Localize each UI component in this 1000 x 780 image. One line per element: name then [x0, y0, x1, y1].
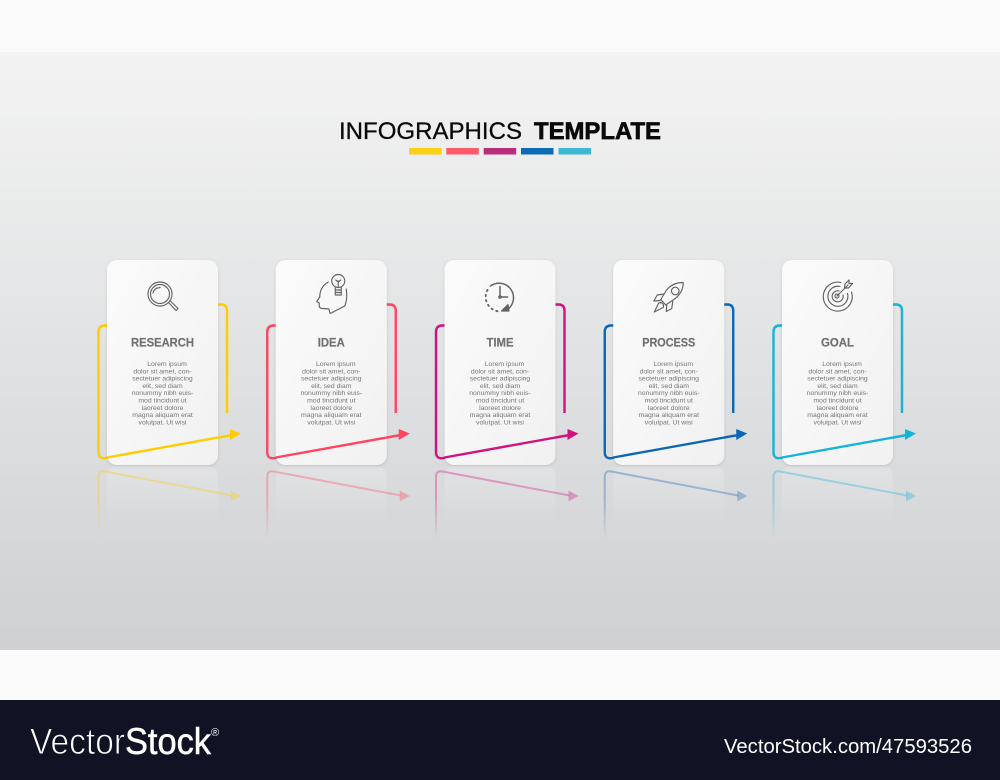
- text: goal: dolor sit amet, con-: [808, 368, 867, 375]
- icon: rocket: [654, 282, 683, 312]
- text: time: dolor sit amet, con-: [471, 368, 529, 375]
- text: process: Lorem ipsum: [653, 361, 693, 368]
- text: research: Lorem ipsum: [147, 361, 187, 368]
- text: goal: sectetuer adipiscing: [807, 376, 868, 383]
- bracket: process: [605, 304, 738, 458]
- footer image id: VectorStock.com/47593526: [724, 736, 972, 758]
- icon: target: [823, 280, 852, 311]
- icon: clock: [486, 283, 514, 311]
- bracket: idea: [267, 304, 401, 458]
- text: goal: Lorem ipsum: [822, 361, 862, 368]
- card: process: [613, 260, 724, 465]
- card: idea: [276, 260, 387, 465]
- text: idea: dolor sit amet, con-: [302, 368, 360, 375]
- icon: magnifier: [148, 282, 178, 310]
- title: [339, 118, 661, 145]
- text: time: nonummy nibh euis-: [469, 390, 531, 397]
- heading: research: RESEARCH: [131, 336, 194, 350]
- heading: goal: GOAL: [821, 336, 854, 350]
- icon: head with light bulb: [317, 274, 347, 314]
- text: process: dolor sit amet, con-: [640, 368, 698, 375]
- text: idea: magna aliquam erat: [301, 412, 362, 419]
- text: goal: volutpat. Ut wisi: [814, 419, 862, 426]
- panel: time: [436, 260, 578, 541]
- text: process: mod tincidunt ut: [645, 398, 693, 404]
- text: research: mod tincidunt ut: [138, 398, 187, 404]
- text: process: magna aliquam erat: [638, 412, 699, 419]
- text: research: magna aliquam erat: [132, 412, 193, 419]
- text: process: elit, sed diam: [649, 383, 689, 390]
- text: time: Lorem ipsum: [485, 361, 525, 368]
- arrow: idea: [276, 429, 410, 458]
- title: TEMPLATE: [534, 118, 661, 145]
- bracket: goal: [774, 304, 907, 458]
- text: idea: elit, sed diam: [311, 383, 352, 390]
- text: research: nonummy nibh euis-: [132, 390, 193, 397]
- text: goal: elit, sed diam: [817, 383, 858, 390]
- card: time: [444, 260, 556, 465]
- text: idea: mod tincidunt ut: [307, 398, 355, 404]
- text: idea: sectetuer adipiscing: [301, 376, 362, 383]
- heading: idea: IDEA: [318, 336, 345, 350]
- text: time: laoreet dolore: [479, 405, 521, 412]
- text: goal: magna aliquam erat: [807, 412, 868, 419]
- arrow: goal: [782, 429, 916, 458]
- bracket: research: [98, 304, 232, 458]
- reflection: process: [604, 470, 747, 534]
- text: process: laoreet dolore: [648, 405, 690, 412]
- panel: goal: [774, 260, 916, 541]
- heading: time: TIME: [486, 336, 514, 350]
- reflection: goal: [772, 470, 916, 534]
- panel: research: [98, 260, 241, 541]
- card: goal: [782, 260, 893, 465]
- text: time: mod tincidunt ut: [476, 398, 524, 404]
- text: research: volutpat. Ut wisi: [139, 419, 187, 426]
- arrow: research: [107, 429, 241, 458]
- text: time: elit, sed diam: [480, 383, 520, 390]
- text: research: dolor sit amet, con-: [133, 368, 192, 375]
- reflection: time: [435, 470, 578, 534]
- arrow: time: [444, 429, 578, 458]
- text: research: elit, sed diam: [142, 383, 183, 390]
- text: research: sectetuer adipiscing: [132, 376, 193, 383]
- card: research: [107, 260, 218, 465]
- text: process: sectetuer adipiscing: [638, 376, 699, 383]
- text: time: sectetuer adipiscing: [470, 376, 530, 383]
- text: idea: Lorem ipsum: [316, 361, 356, 368]
- text: goal: nonummy nibh euis-: [807, 390, 868, 397]
- text: process: nonummy nibh euis-: [638, 390, 700, 397]
- text: time: magna aliquam erat: [470, 412, 530, 419]
- panel: idea: [267, 260, 410, 541]
- footer logo: VectorStock: [30, 721, 211, 762]
- footer band: [0, 700, 1000, 780]
- text: idea: nonummy nibh euis-: [300, 390, 362, 397]
- footer registered mark: ®: [211, 727, 219, 739]
- text: time: volutpat. Ut wisi: [476, 419, 524, 426]
- reflection: idea: [266, 470, 410, 532]
- arrow: process: [613, 429, 747, 458]
- text: research: laoreet dolore: [142, 405, 184, 412]
- bracket: time: [436, 304, 570, 458]
- reflection: research: [98, 470, 241, 534]
- title colour bars: [409, 148, 591, 154]
- text: idea: laoreet dolore: [310, 405, 352, 412]
- panel: process: [605, 260, 747, 541]
- text: idea: volutpat. Ut wisi: [307, 419, 356, 426]
- heading: process: PROCESS: [642, 336, 695, 350]
- background panel: [0, 52, 1000, 650]
- text: goal: mod tincidunt ut: [813, 398, 862, 404]
- title: INFOGRAPHICS: [339, 118, 522, 145]
- text: process: volutpat. Ut wisi: [645, 419, 693, 426]
- text: goal: laoreet dolore: [817, 405, 859, 412]
